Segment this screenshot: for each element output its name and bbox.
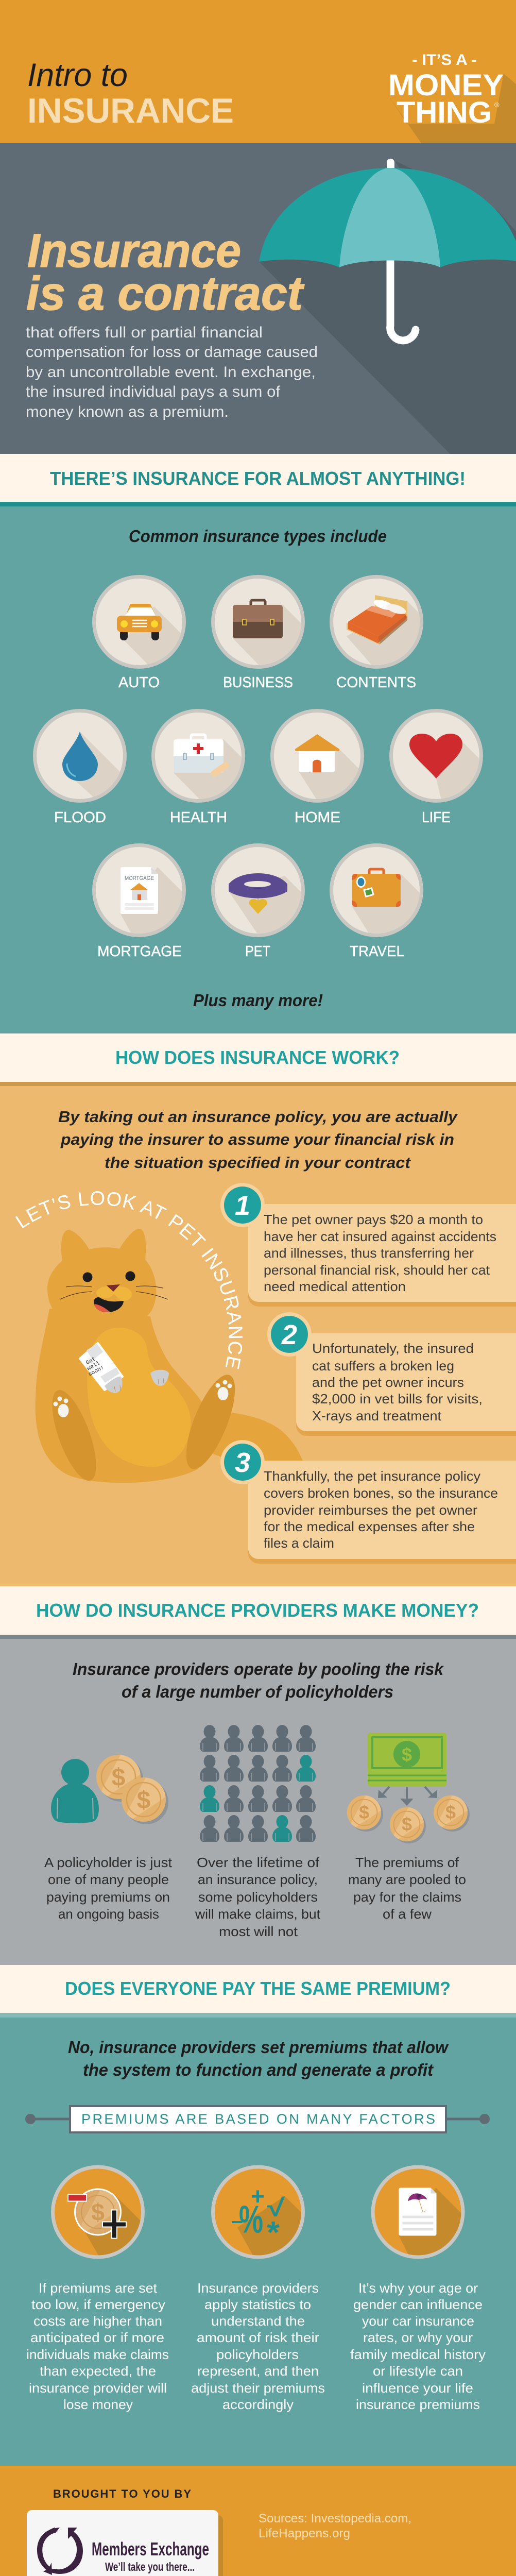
text: pooled column: many are pooled to	[348, 1872, 466, 1887]
panel: pooling risk	[0, 1639, 516, 1965]
step 1 card	[220, 1183, 516, 1307]
title: Insurance: INSURANCE	[27, 91, 234, 130]
sponsor logo: Members Exchange: Members Exchange	[92, 2538, 209, 2560]
illustration: umbrella	[259, 159, 516, 341]
logo: It's a Money Thing: MONEY	[388, 69, 504, 102]
panel: insurance types	[0, 506, 516, 1033]
intro statement: the situation specified in your contract	[105, 1154, 411, 1172]
logo: It's a Money Thing: - IT’S A -	[412, 52, 477, 69]
icon: home	[270, 709, 364, 803]
title: Intro to: Intro to	[27, 57, 128, 93]
panel: premium factors	[0, 2018, 516, 2466]
logo: It's a Money Thing: THING	[397, 96, 492, 129]
step 1 card: 1	[235, 1190, 250, 1221]
text: statistics column: adjust their premiums	[191, 2380, 325, 2396]
statement: no	[68, 2038, 449, 2079]
text block: definition: that offers full or partial financial	[26, 324, 263, 341]
icon: policyholder with coins: $	[137, 1787, 151, 1814]
icon: policy document	[371, 2165, 465, 2259]
step 1 card: personal financial risk, should her cat	[264, 1262, 490, 1278]
step 3 card: Thankfully, the pet insurance policy	[264, 1468, 480, 1484]
label: mortgage: MORTGAGE	[97, 943, 182, 960]
text block: definition: money known as a premium.	[26, 403, 229, 420]
label: life: LIFE	[422, 809, 451, 826]
label: auto: AUTO	[118, 674, 160, 691]
label: flood: FLOOD	[54, 809, 106, 826]
section heading: there's insurance for almost anything	[0, 454, 516, 506]
text: lifetime column: will make claims, but	[195, 1906, 321, 1922]
banner: premiums are based on many factors	[25, 2106, 490, 2132]
text: too low column: anticipated or if more	[30, 2330, 164, 2345]
text: lifetime column: most will not	[219, 1924, 298, 1939]
text: statistics column: represent, and then	[197, 2363, 319, 2379]
icon: maths symbols: √	[267, 2195, 285, 2222]
section heading: does everyone pay the same premium: DOES EVERYONE PAY THE SAME PREMIUM?	[65, 1978, 451, 1999]
section heading: how does insurance work	[0, 1033, 516, 1086]
label: home: HOME	[295, 809, 340, 826]
step 2 card	[267, 1312, 516, 1436]
step 1 card: The pet owner pays $20 a month to	[264, 1212, 483, 1227]
sponsor logo: Members Exchange	[27, 2510, 223, 2576]
icon: travel suitcase	[330, 843, 423, 937]
step 2 card: X-rays and treatment	[312, 1408, 442, 1423]
icon: auto	[92, 575, 186, 669]
section heading: does everyone pay the same premium	[0, 1965, 516, 2018]
intro statement: By taking out an insurance policy, you are actually	[58, 1108, 458, 1126]
step 3 card	[220, 1440, 516, 1564]
text: too low column: individuals make claims	[26, 2347, 169, 2362]
subheading: common types: Common insurance types include	[129, 527, 387, 546]
label: travel: TRAVEL	[350, 943, 404, 960]
text block: definition: the insured individual pays a sum of	[26, 383, 281, 400]
illustration: cat with cast	[36, 1229, 304, 1486]
label: pet: PET	[245, 943, 270, 960]
banner: premiums are based on many factors: PREMIUMS ARE BASED ON MANY FACTORS	[81, 2111, 435, 2127]
text: too low column: lose money	[63, 2397, 133, 2412]
text: plus many more: Plus many more!	[193, 991, 323, 1010]
text: too low column: insurance provider will	[29, 2380, 167, 2396]
text: policyholder column: A policyholder is just	[44, 1855, 173, 1870]
step 2 card: $2,000 in vet bills for visits,	[312, 1391, 483, 1406]
text: too low column: too low, if emergency	[31, 2297, 165, 2312]
text: lifetime column	[195, 1855, 321, 1939]
text: age and gender column: your car insurance	[362, 2313, 474, 2329]
text: pooled column: pay for the claims	[353, 1889, 461, 1905]
text: age and gender column: family medical history	[350, 2347, 486, 2362]
statement: pooling: of a large number of policyholders	[122, 1682, 393, 1701]
statement: no: No, insurance providers set premiums that allow	[68, 2038, 449, 2057]
header band	[0, 0, 516, 143]
text: policyholder column: paying premiums on	[46, 1889, 170, 1905]
icon: life	[389, 709, 483, 803]
step 3 card: 3	[235, 1447, 250, 1478]
text: statistics column: apply statistics to	[204, 2297, 311, 2312]
statement: pooling	[73, 1659, 444, 1701]
text: statistics column: understand the	[211, 2313, 305, 2329]
section heading: how does insurance work: HOW DOES INSURANCE WORK?	[115, 1047, 400, 1068]
label: contents: CONTENTS	[336, 674, 416, 691]
step 3 card: files a claim	[264, 1535, 334, 1551]
icon: banknotes flowing to coins: $	[402, 1814, 412, 1835]
text: age and gender column: or lifestyle can	[373, 2363, 463, 2379]
text: lifetime column: Over the lifetime of	[197, 1855, 320, 1870]
section heading: how do insurance providers make money	[0, 1586, 516, 1639]
text: too low column: If premiums are set	[39, 2280, 158, 2296]
icon: banknotes flowing to coins: $	[445, 1802, 456, 1823]
sponsor logo: Members Exchange: We’ll take you there...	[105, 2560, 195, 2573]
text: too low column: costs are higher than	[33, 2313, 162, 2329]
step 2 card: cat suffers a broken leg	[312, 1358, 454, 1374]
text: age and gender column: rates, or why your	[363, 2330, 473, 2345]
section heading: there's insurance for almost anything: THERE’S INSURANCE FOR ALMOST ANYTHING!	[50, 468, 466, 489]
heading: insurance is a contract: Insurance	[27, 225, 241, 277]
icon: health	[151, 709, 245, 803]
step 2 card: Unfortunately, the insured	[312, 1341, 474, 1356]
section heading: how do insurance providers make money: HOW DO INSURANCE PROVIDERS MAKE MONEY?	[36, 1600, 479, 1621]
text: pooled column: The premiums of	[355, 1855, 459, 1870]
icon: maths symbols: +	[251, 2182, 265, 2209]
cast text: Get	[85, 1356, 97, 1366]
text: sources	[259, 2512, 411, 2540]
icon: maths symbols	[211, 2165, 305, 2259]
text: statistics column: accordingly	[222, 2397, 294, 2412]
text: lifetime column: some policyholders	[198, 1889, 318, 1905]
icon: business	[211, 575, 305, 669]
statement: pooling: Insurance providers operate by pooling the risk	[73, 1659, 444, 1679]
text: too low column: than expected, the	[40, 2363, 156, 2379]
step 2 card: 2	[281, 1319, 297, 1350]
icon: policyholder with coins: $	[112, 1764, 126, 1791]
text: pooled column	[348, 1855, 466, 1922]
icon: maths symbols: –	[231, 2209, 243, 2232]
heading: insurance is a contract	[26, 225, 304, 320]
cast text: well	[87, 1361, 101, 1372]
intro statement: paying the insurer to assume your financial risk in	[60, 1130, 454, 1148]
heading: insurance is a contract: is a contract	[26, 267, 304, 320]
text: statistics column: amount of risk their	[197, 2330, 319, 2345]
panel: insurance is a contract	[0, 143, 516, 454]
icon: coin with plus and minus: $	[91, 2199, 105, 2226]
label: business: BUSINESS	[223, 674, 293, 691]
text: age and gender column: gender can influence	[353, 2297, 483, 2312]
icon: policyholder with coins	[51, 1751, 169, 1825]
icon: banknotes flowing to coins	[347, 1733, 471, 1844]
step 1 card: and illnesses, thus transferring her	[264, 1245, 474, 1261]
step 3 card: provider reimburses the pet owner	[264, 1502, 477, 1518]
icon: flood	[33, 709, 127, 803]
text block: definition	[26, 324, 318, 420]
text block: definition: by an uncontrollable event. In exchange,	[26, 364, 316, 381]
step 3 card: covers broken bones, so the insurance	[264, 1485, 498, 1501]
cast text: soon!	[88, 1365, 106, 1378]
text: policyholder column: an ongoing basis	[58, 1906, 159, 1922]
text: statistics column: policyholders	[216, 2347, 299, 2362]
text: lifetime column: an insurance policy,	[198, 1872, 318, 1887]
label: health: HEALTH	[170, 809, 227, 826]
step 2 card: and the pet owner incurs	[312, 1375, 464, 1390]
chart: grid of policyholders	[200, 1725, 316, 1842]
text: sources: LifeHappens.org	[259, 2527, 350, 2540]
arrows	[378, 1787, 437, 1806]
icon: banknotes flowing to coins: $	[359, 1802, 369, 1823]
text: age and gender column: It’s why your age or	[358, 2280, 478, 2296]
text: statistics column	[191, 2280, 325, 2412]
icon: coin with plus and minus	[51, 2165, 145, 2259]
text: policyholder column	[44, 1855, 173, 1922]
text block: definition: compensation for loss or damage caused	[26, 344, 318, 361]
cast text	[82, 1354, 106, 1378]
text: age and gender column	[350, 2280, 486, 2412]
icon: pet collar	[211, 843, 305, 937]
text: policyholder column: one of many people	[48, 1872, 169, 1887]
icon: mortgage	[92, 843, 186, 937]
text: age and gender column: influence your life	[362, 2380, 473, 2396]
panel: how insurance works	[0, 1086, 516, 1586]
footer	[0, 2466, 516, 2576]
text: pooled column: of a few	[383, 1906, 432, 1922]
icon: contents	[330, 575, 423, 669]
logo: It's a Money Thing: ®	[494, 101, 500, 109]
statement: no: the system to function and generate a profit	[83, 2060, 434, 2079]
step 1 card: need medical attention	[264, 1279, 406, 1294]
text: age and gender column: insurance premiums	[356, 2397, 480, 2412]
step 3 card: for the medical expenses after she	[264, 1519, 475, 1534]
intro statement	[58, 1108, 458, 1172]
logo: It's a Money Thing	[388, 52, 516, 143]
step 1 card: have her cat insured against accidents	[264, 1229, 496, 1244]
text: sources: Sources: Investopedia.com,	[259, 2512, 411, 2526]
label: brought to you by: BROUGHT TO YOU BY	[53, 2487, 191, 2500]
icon: maths symbols: %	[239, 2198, 263, 2241]
text: too low column	[26, 2280, 169, 2412]
icon: mortgage: MORTGAGE	[125, 875, 154, 882]
text: statistics column: Insurance providers	[197, 2280, 319, 2296]
icon: maths symbols: *	[267, 2215, 280, 2249]
curved heading: let's look at pet insurance: LET’S LOOK AT PET INSURANCE	[15, 1191, 243, 1369]
icon: banknotes flowing to coins: $	[402, 1744, 412, 1765]
